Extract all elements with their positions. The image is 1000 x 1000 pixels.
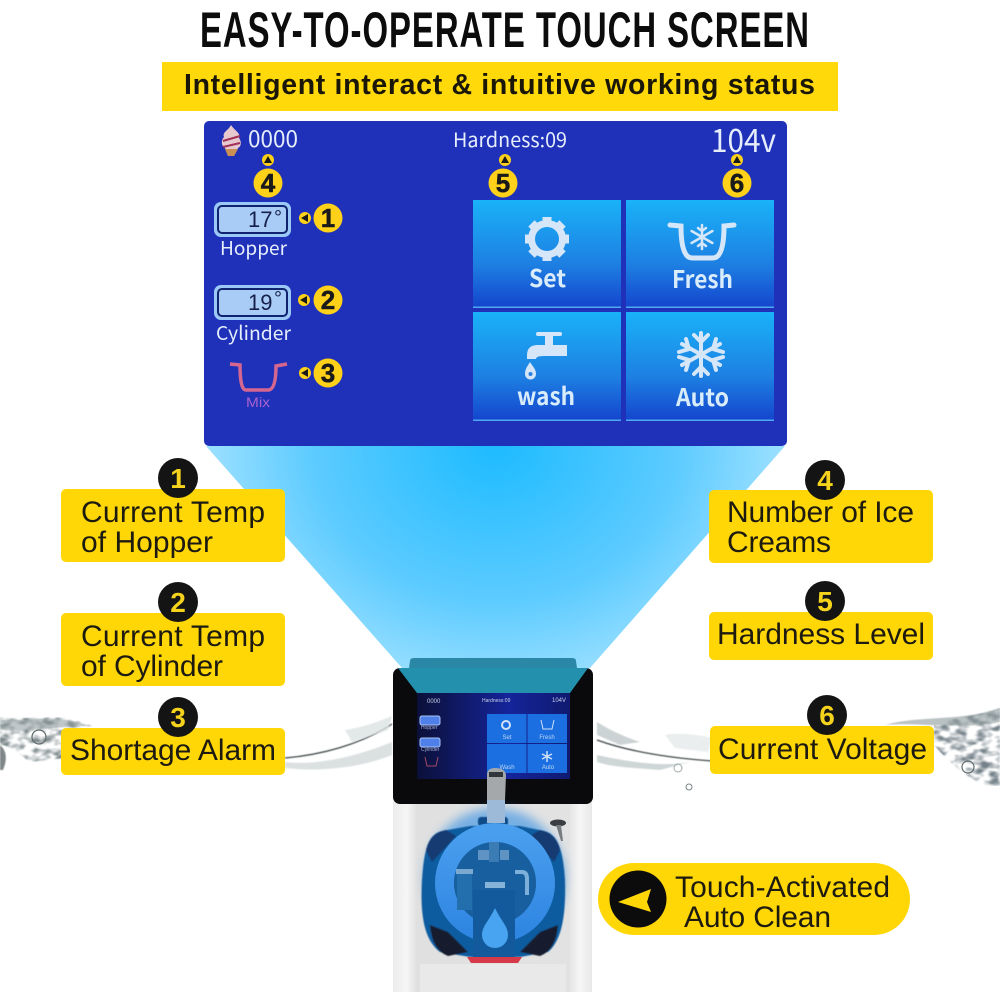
dispenser interior xyxy=(454,842,536,924)
mini screen: Fresh xyxy=(539,735,555,741)
subtitle banner: Intelligent interact & intuitive working status xyxy=(184,69,815,101)
callout 4: number of ice creams: 4 xyxy=(817,465,833,496)
callout 1: hopper temp: of Hopper xyxy=(81,526,213,559)
cylinder temperature xyxy=(214,285,292,346)
callout 2: cylinder temp: 2 xyxy=(170,587,186,618)
button: set xyxy=(473,200,621,308)
hopper temperature xyxy=(214,202,291,261)
icon: faucet xyxy=(525,334,567,380)
callout 1: hopper temp xyxy=(61,458,285,562)
button: wash: wash xyxy=(517,377,575,412)
screen badges: 1 xyxy=(321,203,335,233)
cylinder temperature: Cylinder xyxy=(216,319,292,346)
callout: touch-activated auto clean: Auto Clean xyxy=(684,901,831,934)
icon: gear xyxy=(525,217,569,261)
screen badges: 4 xyxy=(261,168,276,198)
screen badges: 2 xyxy=(321,285,335,315)
machine body xyxy=(393,800,592,992)
icon: snowflake xyxy=(679,333,723,376)
screen badges: 6 xyxy=(730,168,744,198)
mini screen: Wash xyxy=(499,765,515,771)
blue ring xyxy=(444,832,546,934)
mini screen: 0000 xyxy=(427,699,441,705)
projection light beam xyxy=(206,446,785,668)
callout 6: current voltage: Current Voltage xyxy=(718,733,927,766)
callout 3: shortage alarm: 3 xyxy=(170,702,186,733)
cylinder temperature: 19 xyxy=(248,290,272,315)
control panel xyxy=(393,668,593,804)
button: fresh: Fresh xyxy=(672,260,733,295)
callout 5: hardness level xyxy=(709,581,933,660)
toggle switch xyxy=(550,820,566,841)
water splash right xyxy=(597,708,1000,790)
dispenser housing xyxy=(422,817,565,957)
callout 5: hardness level: Hardness Level xyxy=(717,618,925,651)
mini screen: Cylinder xyxy=(421,747,440,753)
subtitle banner xyxy=(162,62,838,111)
callout: touch-activated auto clean xyxy=(598,863,910,935)
button: fresh xyxy=(626,200,774,308)
mini screen: Hopper xyxy=(421,725,438,731)
callout 4: number of ice creams: Number of Ice xyxy=(727,496,914,529)
callout 5: hardness level: 5 xyxy=(817,586,833,617)
callout 2: cylinder temp: Current Temp xyxy=(81,620,265,653)
hopper lid xyxy=(409,658,577,668)
callout 3: shortage alarm: Shortage Alarm xyxy=(70,734,276,767)
callout: touch-activated auto clean: Touch-Activated xyxy=(675,871,890,904)
callout 2: cylinder temp: of Cylinder xyxy=(81,650,223,683)
water splash left xyxy=(0,716,392,770)
ice cream counter: 0000 xyxy=(248,120,298,154)
mini screen: 104V xyxy=(552,698,566,704)
callout 4: number of ice creams xyxy=(709,460,933,563)
callout 6: current voltage: 6 xyxy=(819,700,835,731)
voltage readout: 104v xyxy=(711,116,776,162)
callout 4: number of ice creams: Creams xyxy=(727,526,831,559)
hopper temperature: 17 xyxy=(248,207,272,232)
mini screen xyxy=(417,693,570,779)
callout 1: hopper temp: 1 xyxy=(170,463,186,494)
hardness readout: Hardness:09 xyxy=(453,124,567,153)
screen badges: 3 xyxy=(321,358,335,388)
mini screen: Set xyxy=(502,735,512,741)
callout 6: current voltage xyxy=(710,695,934,774)
button: auto xyxy=(626,312,774,421)
blue outer glow xyxy=(425,808,565,948)
water drop xyxy=(482,908,508,948)
ice cream counter xyxy=(222,120,298,156)
button: wash xyxy=(473,312,621,421)
dispensing handle xyxy=(487,768,506,823)
drain channel xyxy=(473,890,515,957)
mini screen: Hardness:09 xyxy=(482,698,511,704)
callout 2: cylinder temp xyxy=(61,582,285,686)
mini screen: Auto xyxy=(542,765,555,771)
screen badges: 5 xyxy=(496,168,510,198)
hopper temperature: ° xyxy=(274,207,282,229)
icon: tray with snowflake xyxy=(670,225,734,258)
button: set: Set xyxy=(529,259,566,294)
cylinder temperature: ° xyxy=(274,288,282,310)
panel: touch screen enlarged xyxy=(204,116,787,446)
red drip bar xyxy=(467,957,522,963)
hopper temperature: Hopper xyxy=(220,234,288,261)
callout 3: shortage alarm xyxy=(61,697,285,775)
callout 1: hopper temp: Current Temp xyxy=(81,496,265,529)
button: auto: Auto xyxy=(675,378,729,413)
machine xyxy=(393,658,593,992)
screen badges xyxy=(254,154,752,388)
mix shortage icon xyxy=(230,364,287,410)
mix shortage icon: Mix xyxy=(246,394,270,410)
